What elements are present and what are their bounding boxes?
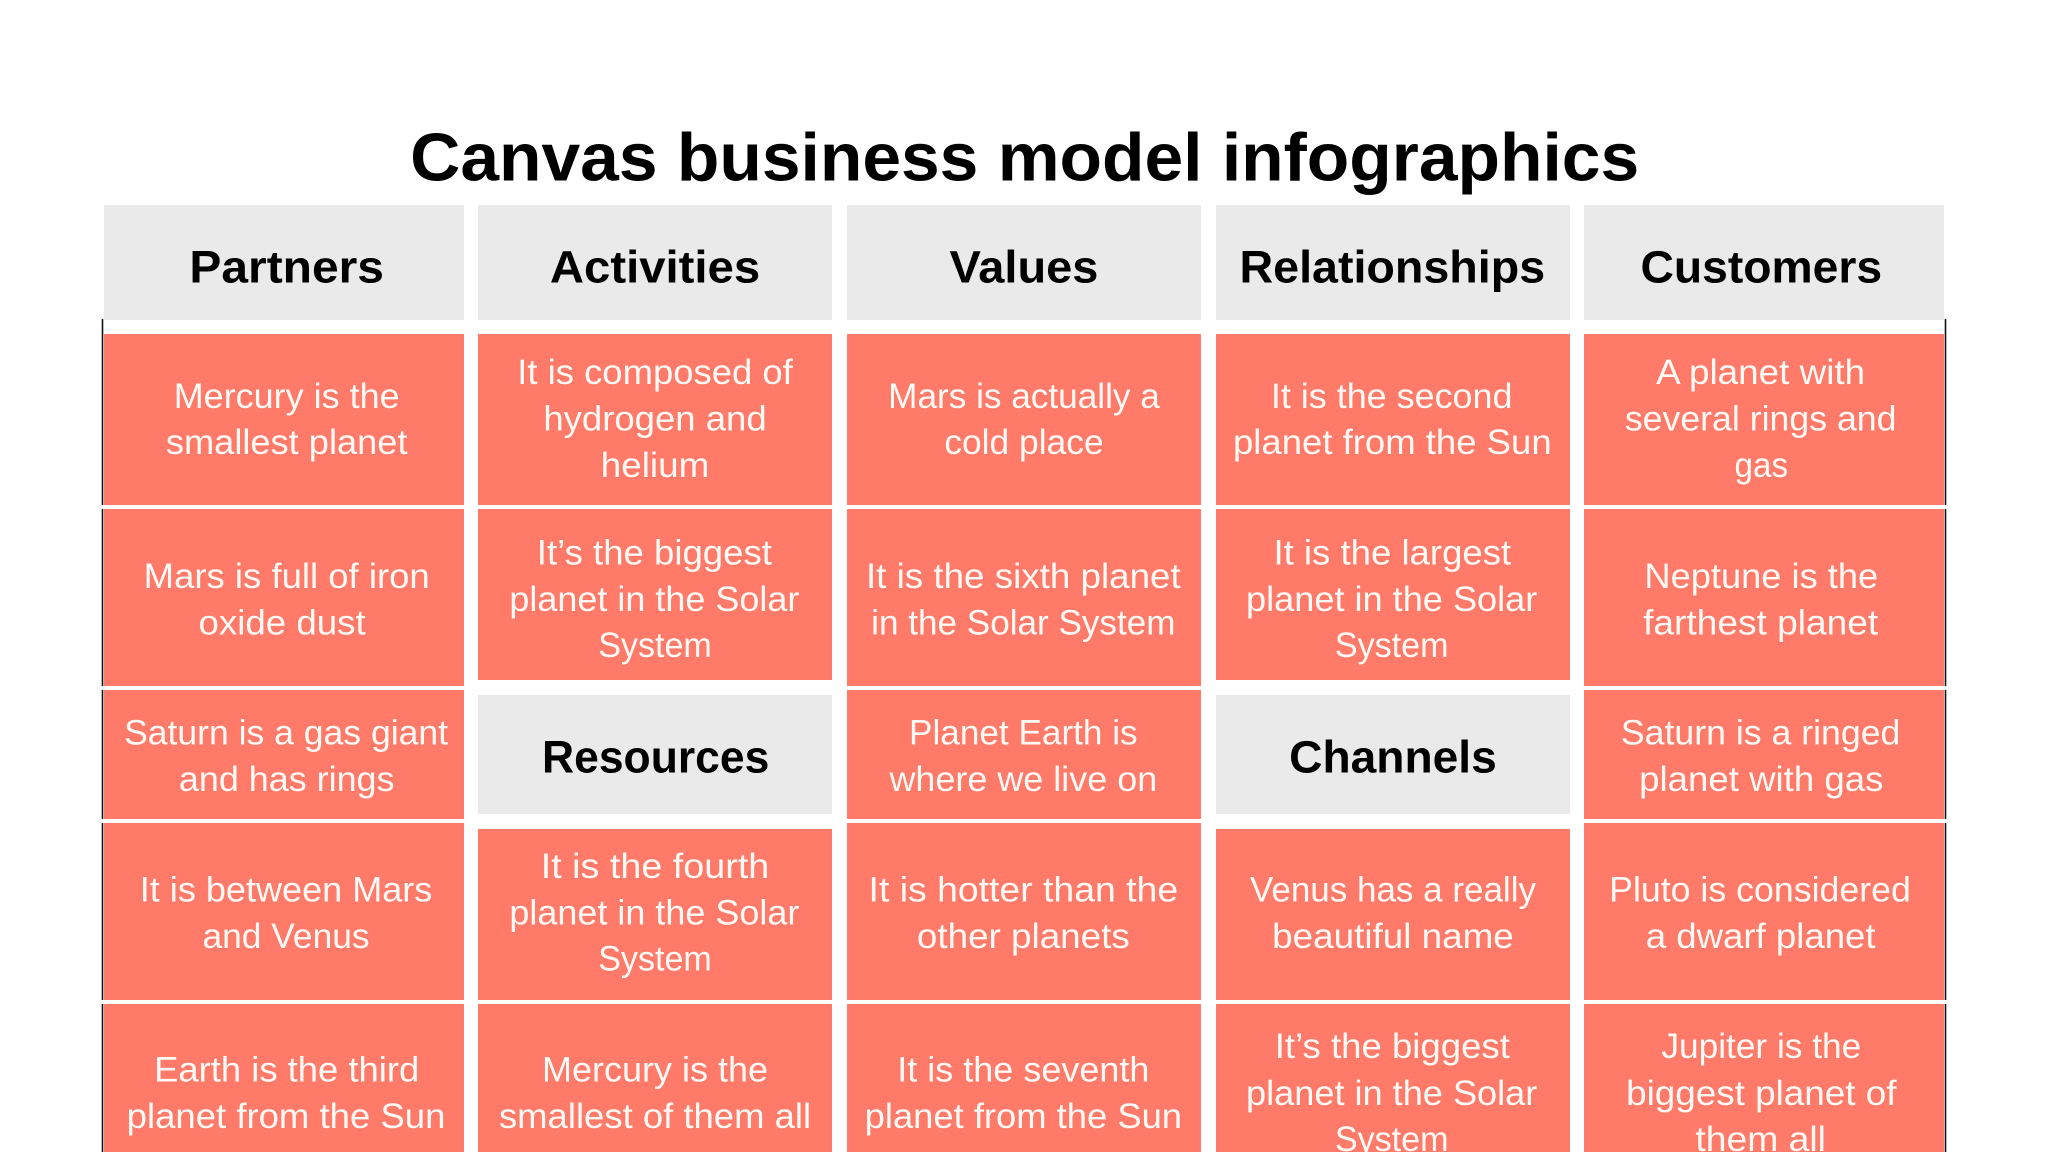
panel: Activities row 1: It is composed of [517,352,793,392]
panel: Partners row 5: planet from the Sun [127,1096,445,1136]
panel: Customers row 1: several rings and [1625,399,1896,439]
header: Partners [104,205,464,320]
panel: Partners row 1: Mercury is the [174,376,400,416]
panel: Activities row 1: helium [601,445,709,485]
header: Relationships: Relationships [1240,242,1545,293]
panel: Relationships row 2: System [1335,625,1448,665]
panel: Customers row 1: A planet with [1656,352,1865,392]
header: Channels [1216,695,1570,814]
panel: Relationships row 1: It is the second [1271,376,1512,416]
panel: Customers row 5: biggest planet of [1626,1073,1897,1113]
panel: Values row 5: planet from the Sun [865,1096,1182,1136]
panel: Values row 5: It is the seventh [897,1050,1149,1090]
panel: Channels row 2: It’s the biggest [1275,1026,1510,1066]
panel: Customers row 1 [1584,334,1944,505]
panel: Partners row 3: and has rings [179,759,394,799]
panel: Activities row 2: It’s the biggest [537,533,772,573]
panel: Resources row 1: planet in the Solar [509,892,800,932]
panel: Relationships row 2: It is the largest [1273,533,1511,573]
panel: Partners row 1 [104,334,464,505]
panel: Values row 3: where we live on [888,759,1157,799]
panel: Channels row 2 [1216,1004,1570,1152]
panel: Partners row 2 [104,509,464,686]
header: Relationships [1216,205,1570,320]
panel: Values row 4: other planets [917,916,1130,956]
right border line [1944,319,1946,1152]
panel: Customers row 2: Neptune is the [1644,556,1878,596]
header: Resources: Resources [542,731,769,782]
panel: Partners row 5 [104,1004,464,1152]
panel: Activities row 1: hydrogen and [543,399,767,439]
panel: Channels row 2: planet in the Solar [1246,1073,1537,1113]
panel: Partners row 2: Mars is full of iron [144,556,430,596]
panel: Activities row 1 [478,334,832,505]
panel: Customers row 5: Jupiter is the [1661,1026,1861,1066]
panel: Activities row 2 [478,509,832,680]
panel: Values row 4 [847,823,1201,1000]
panel: Values row 2 [847,509,1201,686]
header: Values [847,205,1201,320]
panel: Resources row 1: It is the fourth [541,846,769,886]
panel: Channels row 1: beautiful name [1272,916,1514,956]
panel: Values row 1 [847,334,1201,505]
panel: Resources row 1: System [598,939,712,979]
panel: Relationships row 1: planet from the Sun [1233,422,1552,462]
panel: Values row 2: It is the sixth planet [866,556,1181,596]
panel: Customers row 5 [1584,1004,1944,1152]
panel: Values row 2: in the Solar System [871,602,1176,642]
left border line [102,319,104,1152]
panel: Values row 3: Planet Earth is [909,713,1138,753]
panel: Values row 4: It is hotter than the [869,869,1178,909]
panel: Values row 1: Mars is actually a [888,376,1160,416]
panel: Resources row 2: Mercury is the [542,1050,768,1090]
panel: Customers row 3: planet with gas [1639,759,1883,799]
panel: Partners row 3: Saturn is a gas giant [124,713,448,753]
panel: Customers row 1: gas [1735,445,1788,485]
panel: Partners row 4: It is between Mars [140,869,432,909]
title: Canvas business model infographics [410,121,1639,196]
panel: Activities row 2: planet in the Solar [509,579,800,619]
panel: Partners row 4 [104,823,464,1000]
header: Customers: Customers [1640,242,1882,293]
header: Partners: Partners [189,242,384,293]
header: Activities [478,205,832,320]
panel: Partners row 4: and Venus [202,916,370,956]
panel: Partners row 5: Earth is the third [154,1050,419,1090]
header: Customers [1584,205,1944,320]
panel: Customers row 3 [1584,690,1944,819]
panel: Activities row 2: System [598,625,712,665]
panel: Partners row 1: smallest planet [166,422,408,462]
panel: Relationships row 2 [1216,509,1570,680]
panel: Customers row 2 [1584,509,1944,686]
header: Channels: Channels [1289,731,1497,782]
panel: Channels row 1 [1216,829,1570,1000]
panel: Customers row 3: Saturn is a ringed [1621,713,1900,753]
panel: Customers row 2: farthest planet [1643,602,1878,642]
header: Resources [478,695,832,814]
panel: Values row 3 [847,690,1201,819]
panel: Relationships row 2: planet in the Solar [1246,579,1537,619]
panel: Customers row 4: Pluto is considered [1609,869,1911,909]
panel: Channels row 1: Venus has a really [1250,869,1536,909]
panel: Partners row 2: oxide dust [199,602,366,642]
panel: Values row 5 [847,1004,1201,1152]
panel: Customers row 4 [1584,823,1944,1000]
panel: Customers row 4: a dwarf planet [1646,916,1876,956]
panel: Resources row 2: smallest of them all [499,1096,811,1136]
header: Activities: Activities [550,242,760,293]
panel: Values row 1: cold place [944,422,1104,462]
panel: Resources row 2 [478,1004,832,1152]
panel: Partners row 3 [104,690,464,819]
header: Values: Values [950,242,1098,293]
panel: Relationships row 1 [1216,334,1570,505]
panel: Resources row 1 [478,829,832,1000]
